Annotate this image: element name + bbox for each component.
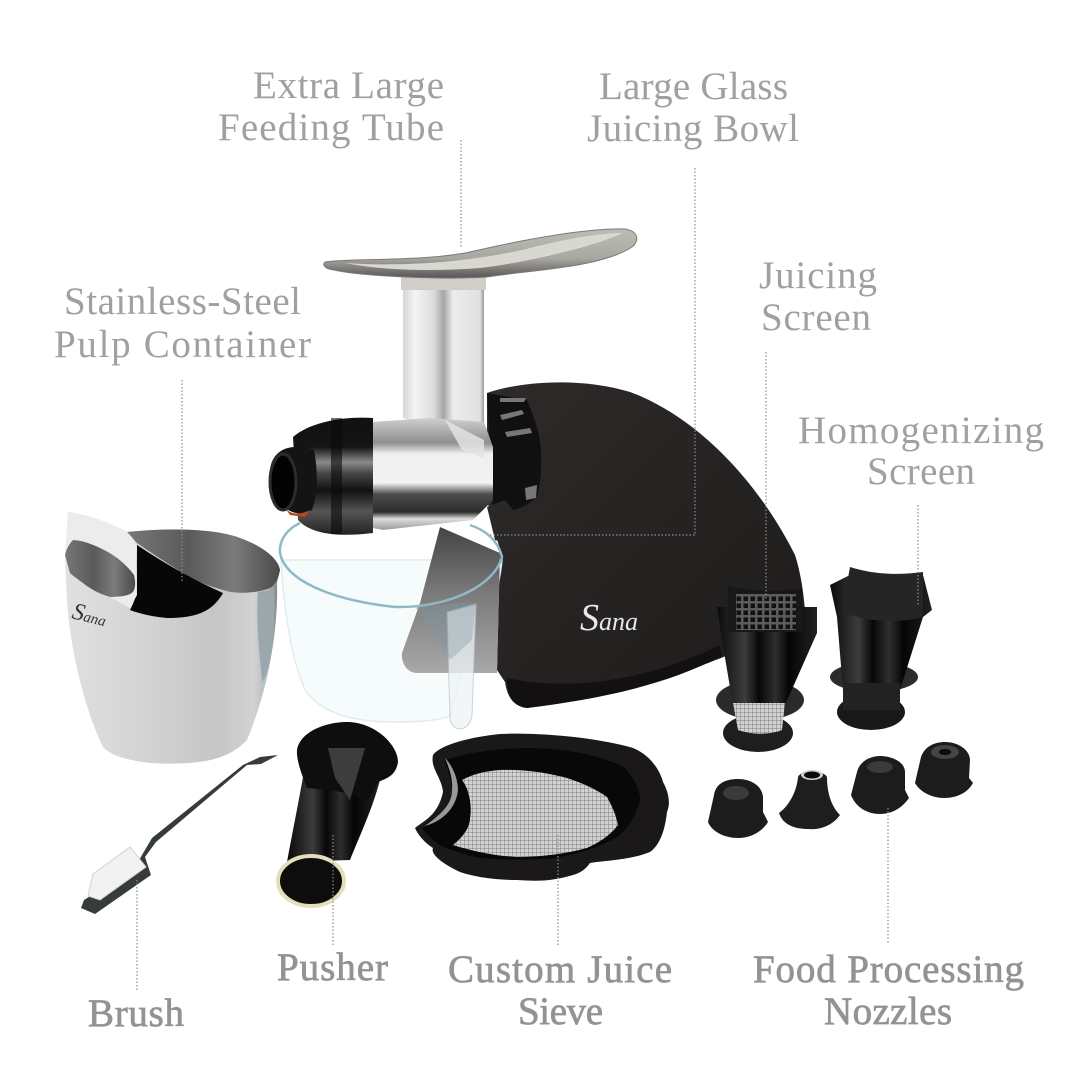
gray body reflection xyxy=(402,527,500,673)
label: brush: Brush xyxy=(88,992,184,1035)
label: custom juice sieve xyxy=(448,948,672,1033)
pusher base xyxy=(278,856,344,906)
stainless-steel pulp container xyxy=(65,512,280,764)
juicer: glass juicing bowl xyxy=(281,527,502,729)
label: extra large feeding tube: Feeding Tube xyxy=(218,106,444,149)
brand logo: Sana xyxy=(70,599,109,632)
brand logo: Sana xyxy=(580,597,638,639)
label: juicing screen xyxy=(759,254,877,339)
label: stainless-steel pulp container: Pulp Container xyxy=(54,323,311,366)
juicer: chamber xyxy=(270,418,493,535)
brush xyxy=(81,755,278,914)
label: stainless-steel pulp container xyxy=(54,280,311,366)
juicer: bowl front rim xyxy=(280,523,502,607)
juicing screen xyxy=(716,585,817,752)
label: large glass juicing bowl: Juicing Bowl xyxy=(587,107,799,150)
juicer: motor collar xyxy=(487,393,541,547)
juicer: motor body xyxy=(487,382,806,708)
label: food processing nozzles xyxy=(753,948,1024,1033)
pusher xyxy=(278,722,398,906)
label: custom juice sieve: Custom Juice xyxy=(448,948,672,991)
label: extra large feeding tube xyxy=(218,64,444,149)
label: food processing nozzles: Food Processing xyxy=(753,948,1024,991)
custom juice sieve xyxy=(415,734,669,881)
label: juicing screen: Juicing xyxy=(759,254,877,297)
label: homogenizing screen xyxy=(798,409,1044,493)
label: pusher: Pusher xyxy=(277,946,388,989)
label: extra large feeding tube: Extra Large xyxy=(253,64,444,107)
label: large glass juicing bowl xyxy=(587,65,799,150)
label: homogenizing screen: Screen xyxy=(867,450,975,493)
label: homogenizing screen: Homogenizing xyxy=(798,409,1044,452)
label: food processing nozzles: Nozzles xyxy=(824,990,952,1033)
label: large glass juicing bowl: Large Glass xyxy=(599,65,788,108)
homogenizing screen xyxy=(830,567,932,730)
juicer: feeding tube xyxy=(324,229,637,450)
food processing nozzles xyxy=(708,742,973,838)
leader lines xyxy=(137,140,918,990)
label: custom juice sieve: Sieve xyxy=(518,990,603,1033)
label: stainless-steel pulp container: Stainless-Steel xyxy=(64,280,301,323)
label: juicing screen: Screen xyxy=(761,296,871,339)
